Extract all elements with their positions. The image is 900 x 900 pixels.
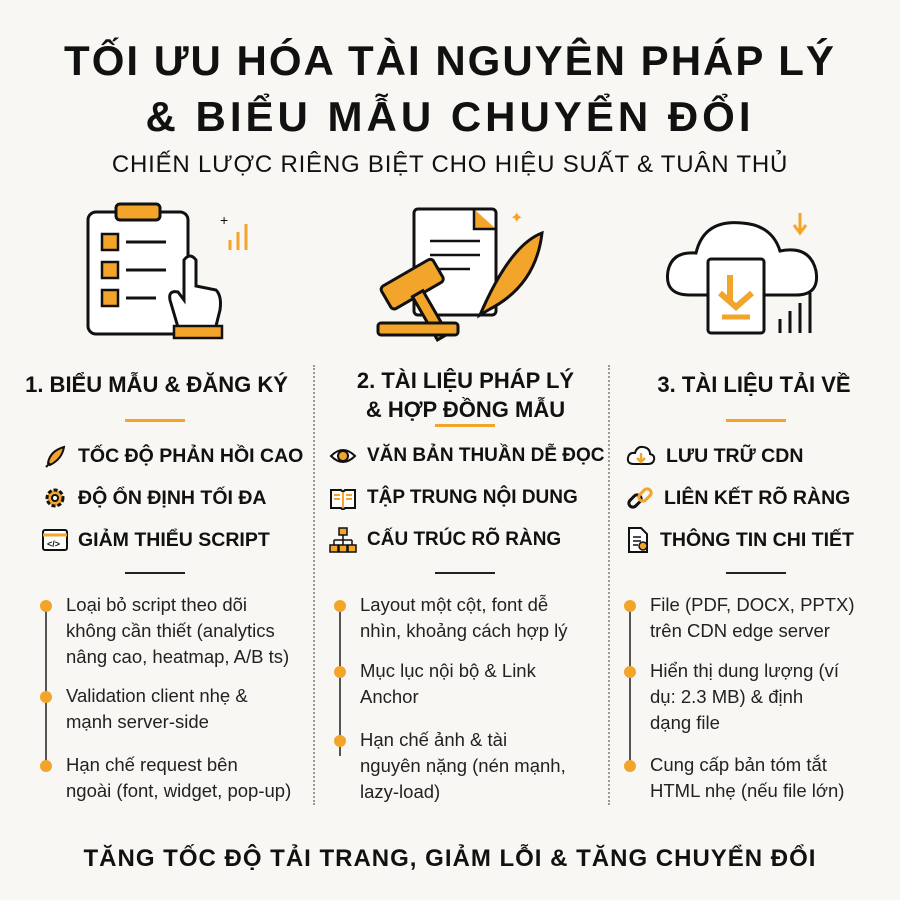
column divider [313, 365, 315, 805]
timeline bullets col2 [334, 594, 568, 802]
timeline bullets col2: Mục lục nội bộ & Link [360, 660, 536, 681]
feature list col1: TỐC ĐỘ PHẢN HỒI CAO [78, 444, 303, 466]
feature list col3: LƯU TRỮ CDN [666, 444, 803, 466]
title: TỐI ƯU HÓA TÀI NGUYÊN PHÁP LÝ [64, 37, 836, 84]
feature list col1: </> [47, 539, 60, 549]
feature list col3: THÔNG TIN CHI TIẾT [660, 528, 854, 550]
icon: gavel and document: ✦ [510, 210, 523, 227]
panel: column 1 [25, 372, 303, 801]
timeline bullets col3: trên CDN edge server [650, 620, 830, 641]
heading col2: 2. TÀI LIỆU PHÁP LÝ [357, 368, 574, 393]
timeline bullets col3: Cung cấp bản tóm tắt [650, 754, 827, 775]
icon: cloud download [666, 213, 818, 334]
subtitle: CHIẾN LƯỢC RIÊNG BIỆT CHO HIỆU SUẤT & TUÂN THỦ [112, 151, 788, 178]
feature list col3: LIÊN KẾT RÕ RÀNG [664, 486, 850, 508]
heading col2: & HỢP ĐỒNG MẪU [366, 397, 565, 422]
feature list col3 [626, 444, 854, 553]
timeline bullets col2: Anchor [360, 686, 419, 707]
timeline bullets col2: nhìn, khoảng cách hợp lý [360, 620, 568, 641]
timeline bullets col3: Hiển thị dung lượng (ví [650, 660, 839, 681]
timeline bullets col2: nguyên nặng (nén mạnh, [360, 755, 566, 776]
timeline bullets col2: Layout một cột, font dễ [360, 594, 548, 615]
timeline bullets col1: nâng cao, heatmap, A/B ts) [66, 646, 289, 667]
timeline bullets col1 [40, 594, 291, 801]
feature list col2: VĂN BẢN THUẦN DỄ ĐỌC [367, 445, 604, 466]
feature list col2: CẤU TRÚC RÕ RÀNG [367, 529, 561, 550]
heading col1: 1. BIỂU MẪU & ĐĂNG KÝ [25, 372, 288, 397]
title: & BIỂU MẪU CHUYỂN ĐỔI [145, 93, 755, 140]
timeline bullets col1: mạnh server-side [66, 711, 209, 732]
feature list col1: GIẢM THIỂU SCRIPT [78, 528, 270, 550]
heading col2 [357, 368, 574, 422]
feature list col1: ĐỘ ỔN ĐỊNH TỐI ĐA [78, 486, 266, 508]
timeline bullets col3: dạng file [650, 712, 720, 733]
timeline bullets col3: File (PDF, DOCX, PPTX) [650, 594, 855, 615]
timeline bullets col2: lazy-load) [360, 781, 440, 802]
icon: gavel and document [376, 208, 544, 342]
heading col3: 3. TÀI LIỆU TẢI VỀ [657, 372, 851, 397]
timeline bullets col3: dụ: 2.3 MB) & định [650, 686, 803, 707]
timeline bullets col3: HTML nhẹ (nếu file lớn) [650, 780, 844, 801]
icon: clipboard checklist: + [220, 212, 228, 228]
icon: clipboard checklist [86, 202, 248, 340]
feature list col2: TẬP TRUNG NỘI DUNG [367, 487, 578, 508]
panel: column 2 [329, 368, 604, 802]
timeline bullets col3 [624, 594, 855, 801]
timeline bullets col1: Hạn chế request bên [66, 754, 238, 775]
title [64, 37, 836, 140]
timeline bullets col1: Validation client nhẹ & [66, 685, 248, 706]
feature list col2 [329, 444, 604, 553]
timeline bullets col1: Loại bỏ script theo dõi [66, 594, 247, 615]
timeline bullets col1: ngoài (font, widget, pop-up) [66, 780, 291, 801]
timeline bullets col1: không cần thiết (analytics [66, 620, 275, 641]
feature list col1 [42, 444, 303, 551]
footer: TĂNG TỐC ĐỘ TẢI TRANG, GIẢM LỖI & TĂNG CHUYỂN ĐỔI [84, 845, 816, 872]
timeline bullets col2: Hạn chế ảnh & tài [360, 729, 507, 750]
panel: column 3 [624, 372, 855, 801]
